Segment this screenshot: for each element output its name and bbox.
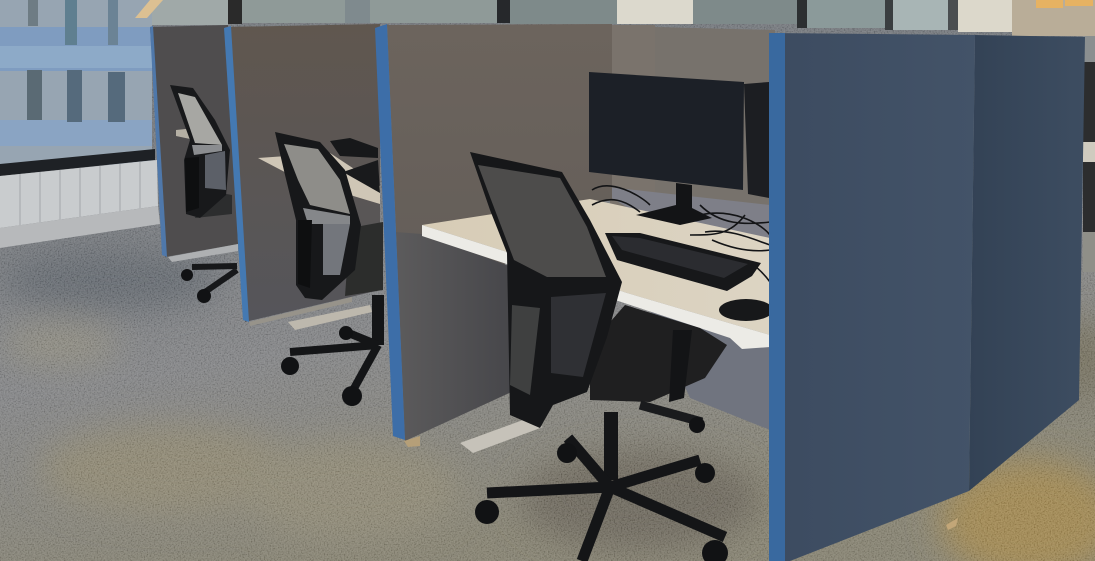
chair base foot xyxy=(460,420,543,453)
chair mesh xyxy=(284,144,350,214)
window and building view xyxy=(0,0,1095,165)
partition: near cubicle side panel xyxy=(375,24,612,447)
chair back xyxy=(170,85,230,218)
desk front edge xyxy=(422,225,770,349)
chair mesh xyxy=(478,165,606,277)
chair back xyxy=(275,132,361,300)
chair back xyxy=(470,152,622,428)
partition: near cubicle back wall xyxy=(590,25,775,430)
window frame xyxy=(0,149,155,176)
mouse xyxy=(719,299,773,321)
right background desk xyxy=(1083,36,1095,272)
radiator xyxy=(0,160,158,228)
wall base xyxy=(0,206,160,248)
chair seat xyxy=(345,222,383,296)
chair seat xyxy=(195,190,232,218)
chair: near xyxy=(460,152,728,561)
chair lower opening xyxy=(551,293,606,377)
chair: far xyxy=(170,85,237,303)
chair mesh xyxy=(178,93,222,145)
chair lumbar xyxy=(510,305,540,395)
chair: middle xyxy=(275,132,384,406)
chair seat xyxy=(590,305,727,402)
partition: middle cubicle xyxy=(224,24,380,330)
monitor xyxy=(589,72,769,225)
partition: far cubicle xyxy=(150,25,238,262)
cables xyxy=(592,186,770,282)
desk surface xyxy=(422,199,770,335)
keyboard xyxy=(605,233,761,291)
partition: blue front panels xyxy=(769,33,1085,561)
